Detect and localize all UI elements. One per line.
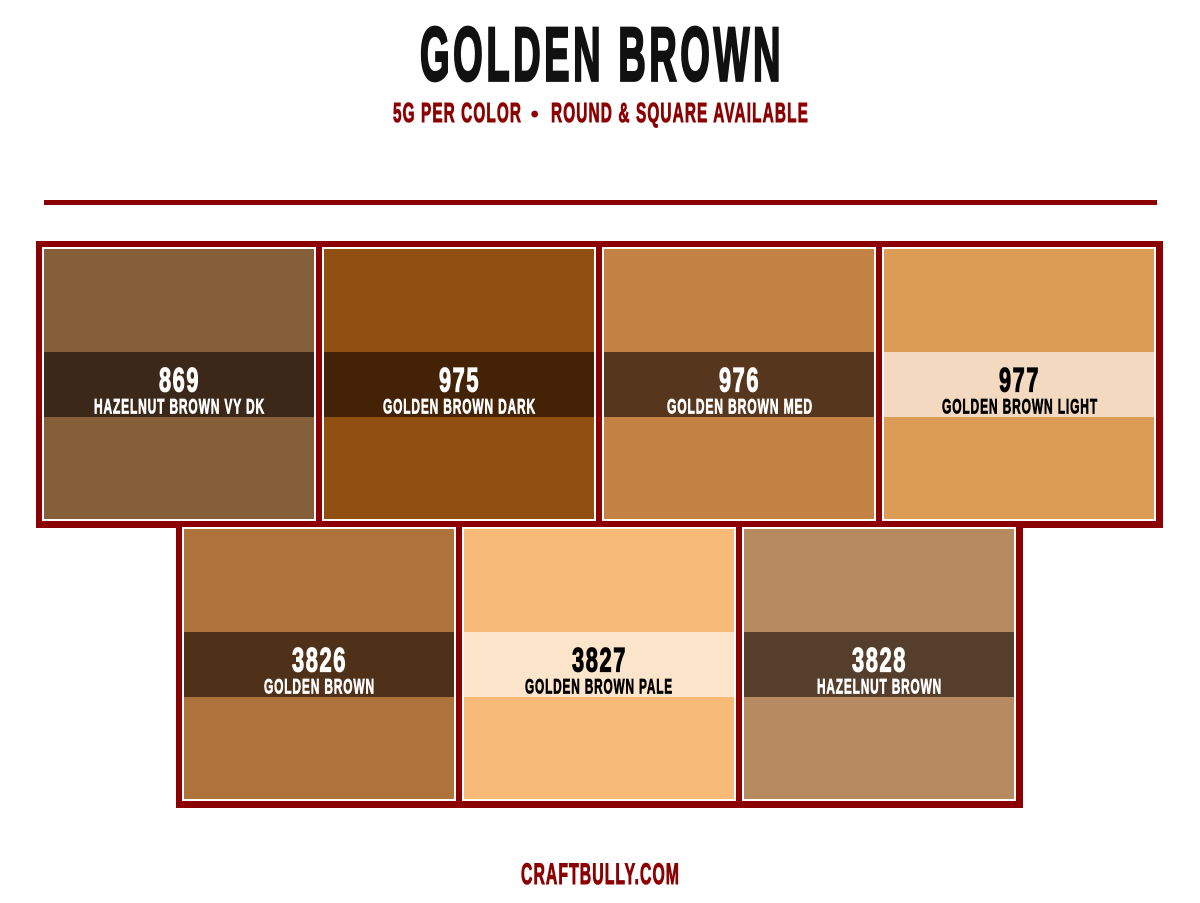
swatch 977: 977	[999, 362, 1040, 400]
panel: top row frame	[36, 241, 1163, 528]
swatch 3827: 3827	[572, 642, 627, 680]
subtitle: 5G PER COLOR	[393, 97, 522, 128]
panel: bottom row frame	[176, 521, 1023, 808]
swatch 3826: 3826	[292, 642, 347, 680]
subtitle: ROUND & SQUARE AVAILABLE	[551, 97, 809, 128]
footer: CRAFTBULLY.COM	[521, 858, 680, 891]
swatch 976: GOLDEN BROWN MED	[667, 394, 813, 418]
swatch 3827: GOLDEN BROWN PALE	[525, 674, 673, 698]
swatch 3827	[462, 527, 736, 801]
swatch 975: GOLDEN BROWN DARK	[383, 394, 536, 418]
swatch 3828	[742, 527, 1016, 801]
swatch 977	[882, 247, 1156, 521]
swatch 3828: 3828	[852, 642, 907, 680]
swatch 3826: GOLDEN BROWN	[264, 674, 375, 698]
swatch 975: 975	[439, 362, 480, 400]
swatch 869: 869	[159, 362, 200, 400]
subtitle: •	[530, 101, 539, 128]
swatch 976	[602, 247, 876, 521]
subtitle	[393, 97, 809, 128]
swatch 3826	[182, 527, 456, 801]
swatch 869: HAZELNUT BROWN VY DK	[94, 394, 265, 418]
swatch 869	[42, 247, 316, 521]
swatch 975	[322, 247, 596, 521]
title: GOLDEN BROWN	[420, 13, 784, 98]
header divider	[44, 200, 1157, 205]
swatch 3828: HAZELNUT BROWN	[817, 674, 942, 698]
swatch 976: 976	[719, 362, 760, 400]
